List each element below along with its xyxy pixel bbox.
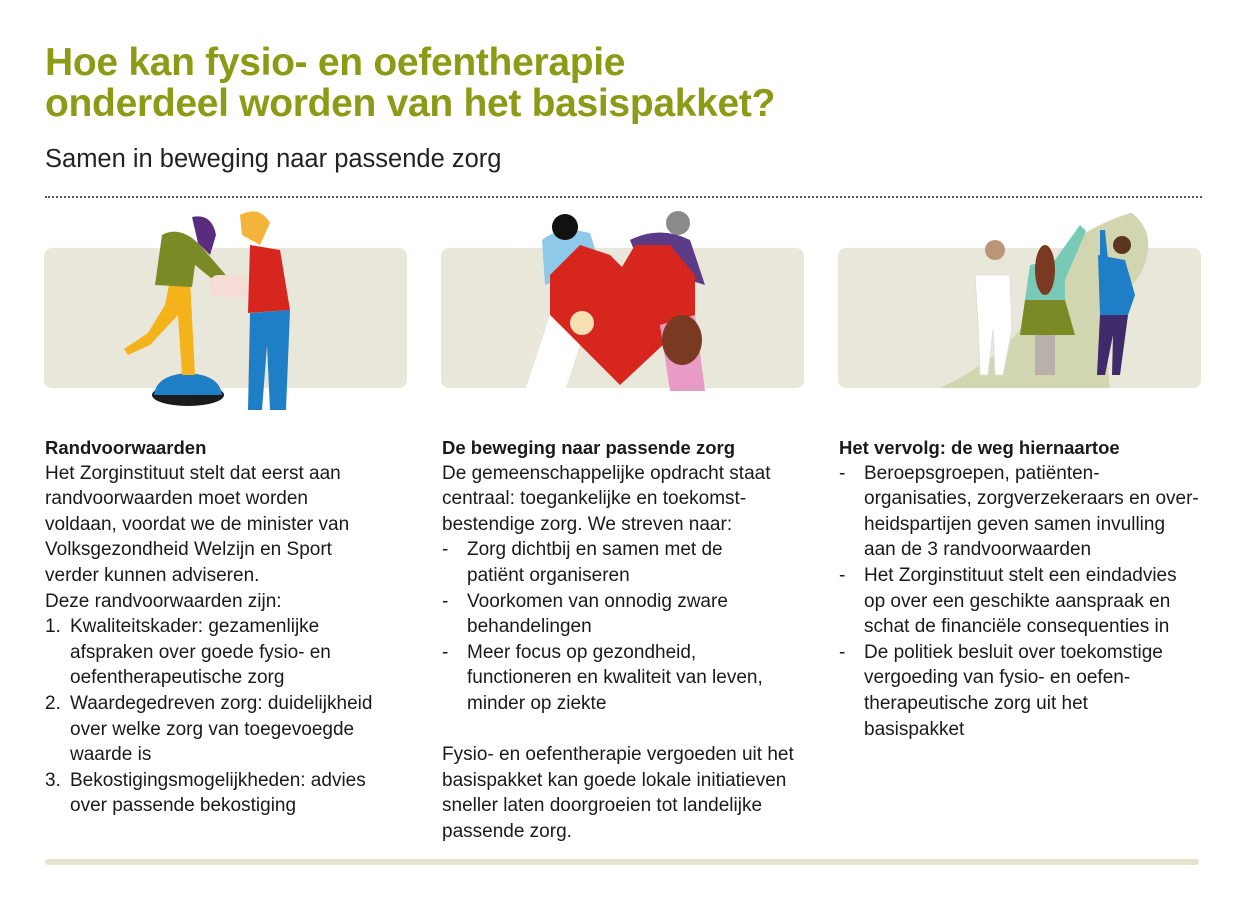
column: Randvoorwaarden: over passende bekostiging [70,795,296,816]
column: Randvoorwaarden: Volksgezondheid Welzijn en Sport [45,539,332,560]
column: De beweging naar passende zorg: - [442,591,448,612]
column: Het vervolg: - [839,463,845,484]
column: Randvoorwaarden: 3. [45,770,61,791]
column: Het vervolg: heidspartijen geven samen invulling [864,514,1165,535]
column: Randvoorwaarden: Randvoorwaarden [45,437,206,458]
column: De beweging naar passende zorg: behandelingen [467,616,592,637]
column: Randvoorwaarden: Waardegedreven zorg: duidelijkheid [70,693,372,714]
column: Het vervolg: Het Zorginstituut stelt een eindadvies [864,565,1177,586]
column: Het vervolg: - [839,565,845,586]
column: Randvoorwaarden: 1. [45,616,61,637]
column: De beweging naar passende zorg: Fysio- en oefentherapie vergoeden uit het [442,744,794,765]
illustration: group high-five on path [940,213,1148,388]
column: Randvoorwaarden: verder kunnen adviseren. [45,565,259,586]
column: De beweging naar passende zorg: De beweging naar passende zorg [442,437,735,458]
column: Het vervolg: basispakket [864,719,964,740]
column: De beweging naar passende zorg [442,437,794,842]
column: De beweging naar passende zorg: - [442,642,448,663]
column: Randvoorwaarden: waarde is [70,744,151,765]
illustration: people carrying heart [526,211,705,391]
column: Randvoorwaarden: 2. [45,693,61,714]
column: Randvoorwaarden: afspraken over goede fysio- en [70,642,331,663]
column: Het vervolg: Het vervolg: de weg hiernaartoe [839,437,1120,458]
column: De beweging naar passende zorg: functioneren en kwaliteit van leven, [467,667,763,688]
column: De beweging naar passende zorg: Meer focus op gezondheid, [467,642,696,663]
title: Hoe kan fysio- en oefentherapie [45,41,625,84]
column: Het vervolg [839,437,1199,740]
column: Randvoorwaarden [45,437,372,816]
column: Randvoorwaarden: Het Zorginstituut stelt dat eerst aan [45,463,341,484]
column: De beweging naar passende zorg: bestendige zorg. We streven naar: [442,514,732,535]
column: Het vervolg: organisaties, zorgverzekeraars en over- [864,488,1199,509]
illustration: therapist with patient on balance board [124,211,290,410]
column: Randvoorwaarden: over welke zorg van toegevoegde [70,719,354,740]
column: De beweging naar passende zorg: - [442,539,448,560]
column: Het vervolg: op over een geschikte aanspraak en [864,591,1170,612]
column: Het vervolg: Beroepsgroepen, patiënten- [864,463,1100,484]
column: Het vervolg: vergoeding van fysio- en oefen- [864,667,1130,688]
panel: beweging background [441,248,804,388]
column: De beweging naar passende zorg: minder op ziekte [467,693,606,714]
column: Het vervolg: schat de financiële consequenties in [864,616,1169,637]
column: De beweging naar passende zorg: centraal: toegankelijke en toekomst- [442,488,746,509]
column: De beweging naar passende zorg: sneller laten doorgroeien tot landelijke [442,795,762,816]
column: Het vervolg: - [839,642,845,663]
title: onderdeel worden van het basispakket? [45,82,775,125]
column: Randvoorwaarden: oefentherapeutische zorg [70,667,284,688]
panel: randvoorwaarden background [44,248,407,388]
column: Randvoorwaarden: Bekostigingsmogelijkheden: advies [70,770,366,791]
column: Randvoorwaarden: randvoorwaarden moet worden [45,488,308,509]
column: De beweging naar passende zorg: basispakket kan goede lokale initiatieven [442,770,786,791]
column: Randvoorwaarden: Kwaliteitskader: gezamenlijke [70,616,319,637]
column: Het vervolg: therapeutische zorg uit het [864,693,1088,714]
column: De beweging naar passende zorg: passende zorg. [442,821,572,842]
subtitle: Samen in beweging naar passende zorg [45,145,501,173]
column: De beweging naar passende zorg: patiënt organiseren [467,565,630,586]
column: De beweging naar passende zorg: Zorg dichtbij en samen met de [467,539,723,560]
panel: vervolg background [838,248,1201,388]
column: Randvoorwaarden: Deze randvoorwaarden zijn: [45,591,282,612]
column: De beweging naar passende zorg: De gemeenschappelijke opdracht staat [442,463,770,484]
column: De beweging naar passende zorg: Voorkomen van onnodig zware [467,591,728,612]
column: Het vervolg: De politiek besluit over toekomstige [864,642,1163,663]
column: Randvoorwaarden: voldaan, voordat we de minister van [45,514,349,535]
title [45,41,775,125]
column: Het vervolg: aan de 3 randvoorwaarden [864,539,1091,560]
